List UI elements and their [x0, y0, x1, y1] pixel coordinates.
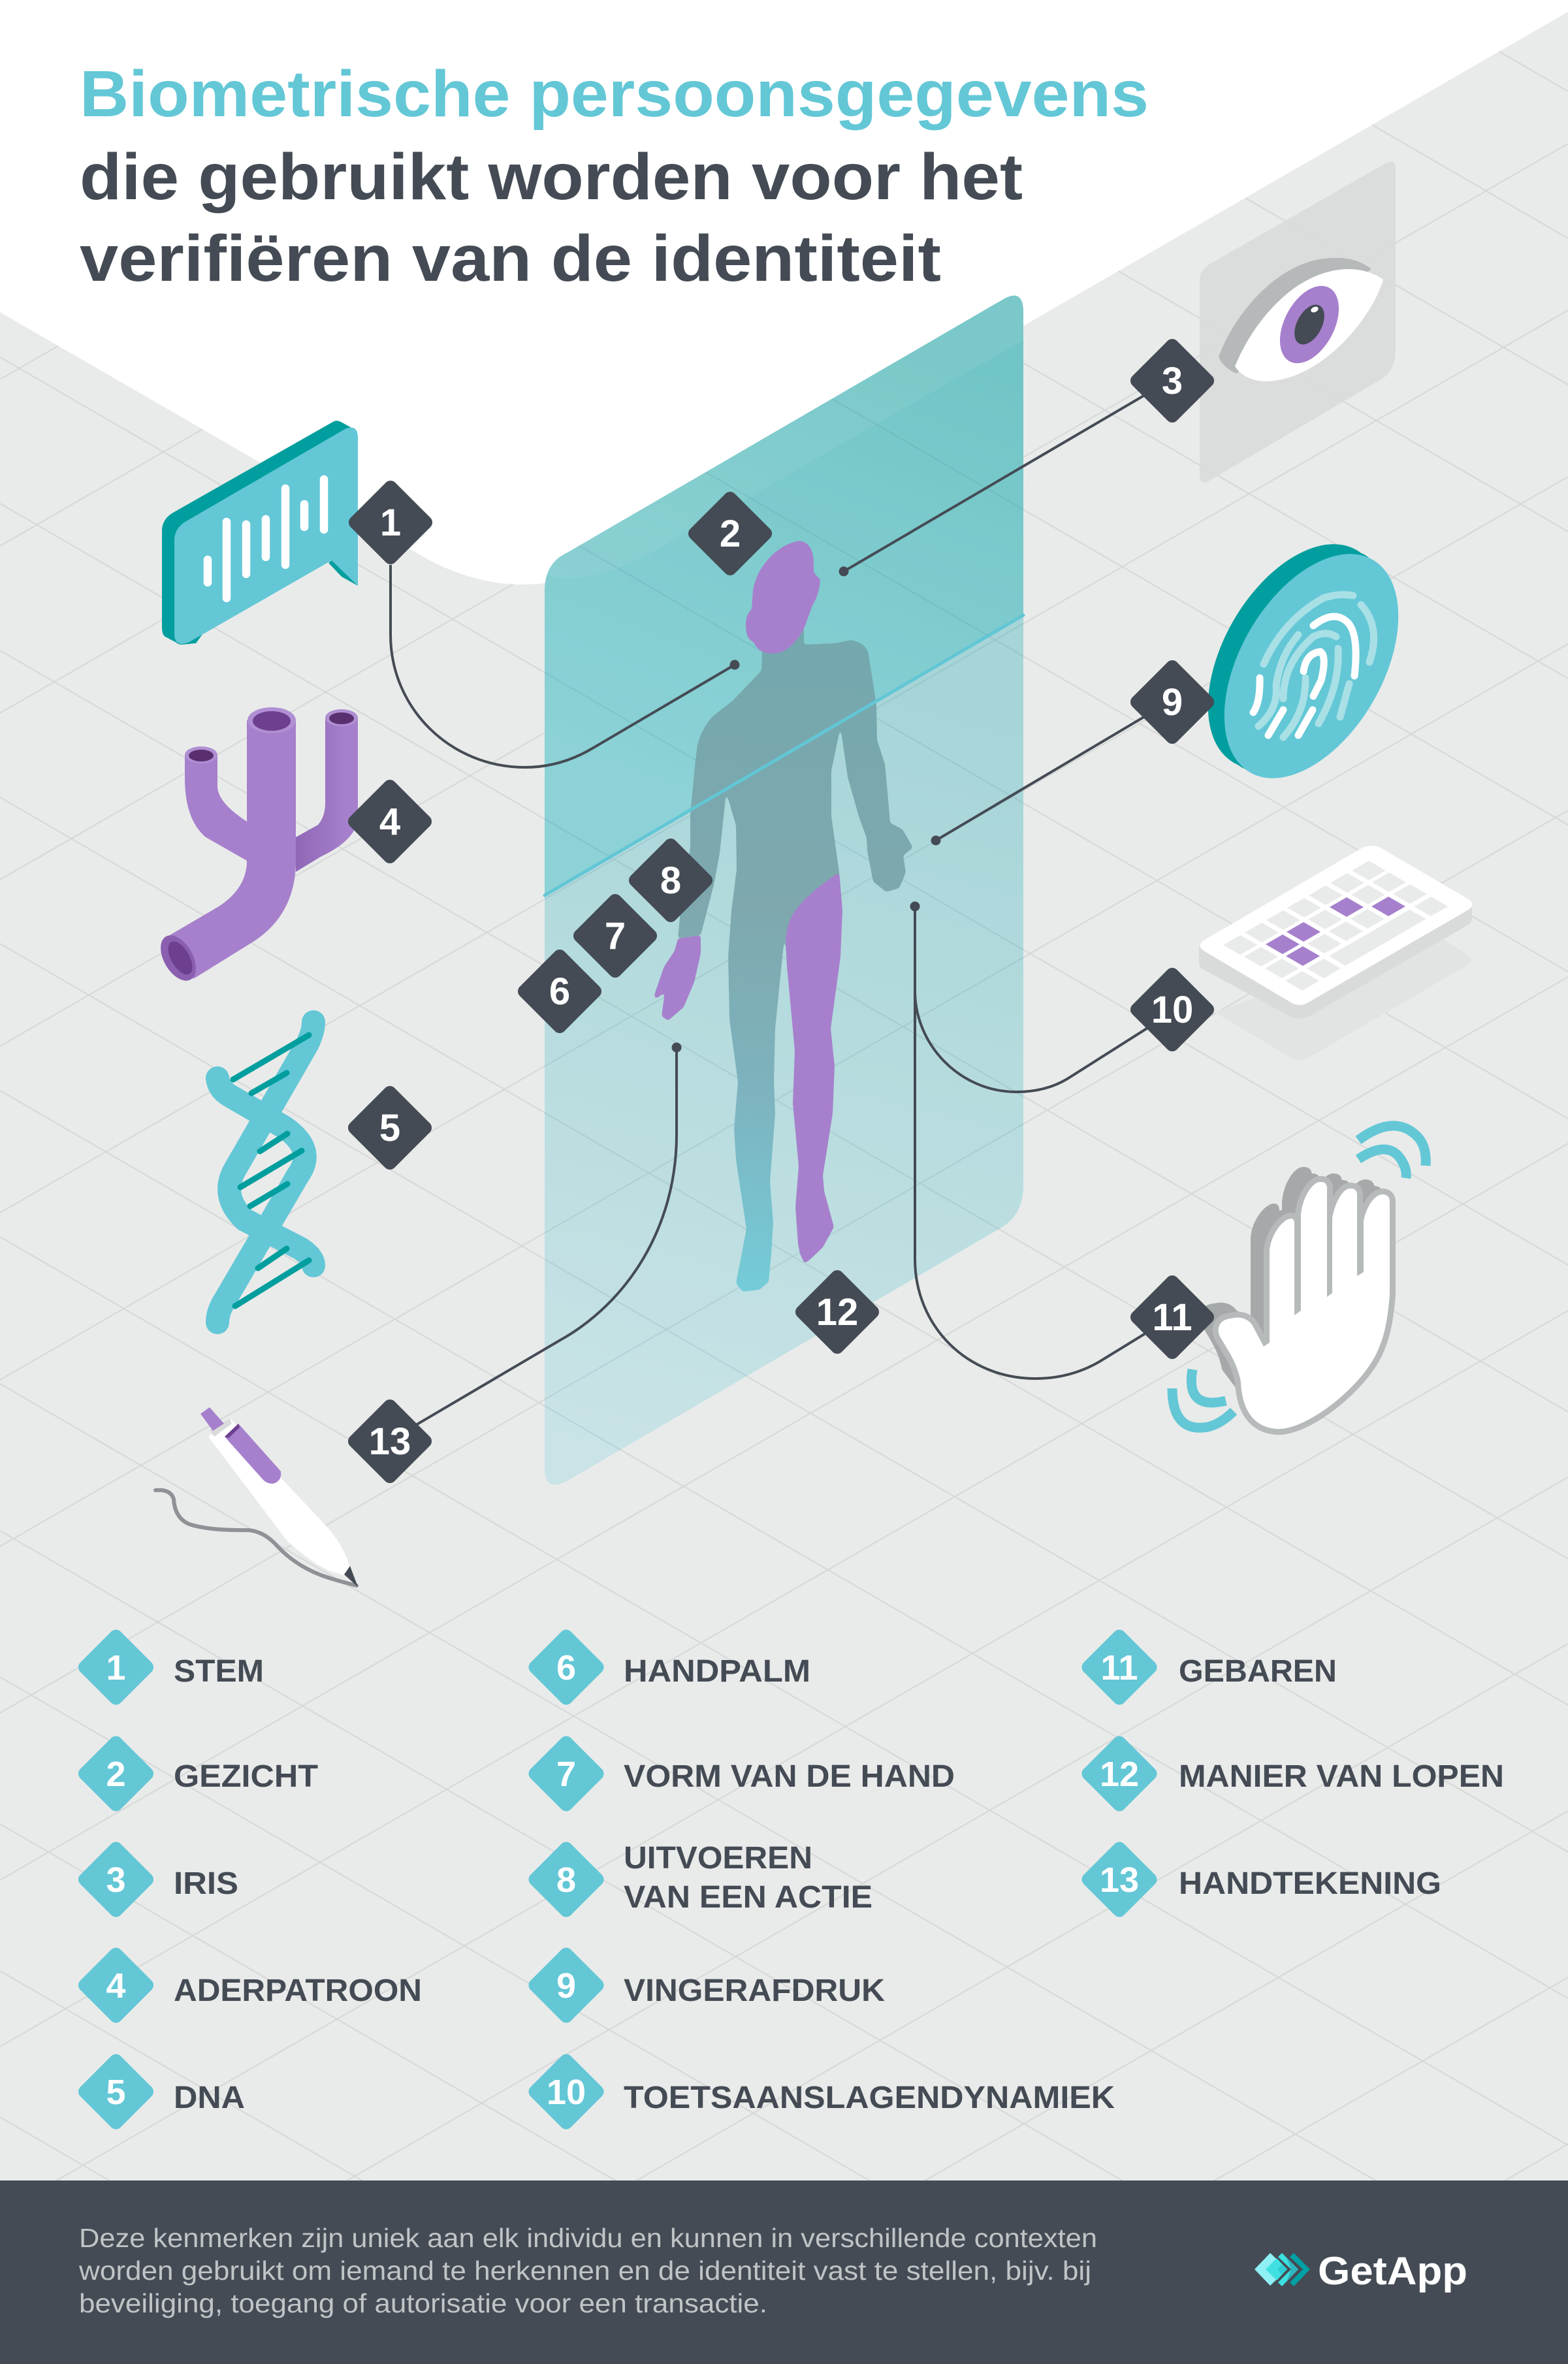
badge 13 [345, 1397, 434, 1486]
badge 3: 3 [1162, 360, 1183, 402]
legend item 9: 9 [556, 1966, 576, 2005]
legend item 8 [526, 1839, 872, 1920]
badge 2: 2 [720, 513, 741, 555]
badge 7: 7 [605, 915, 626, 957]
legend item 4: 4 [106, 1966, 126, 2005]
legend item 12: MANIER VAN LOPEN [1179, 1759, 1504, 1794]
legend item 6 [526, 1627, 810, 1708]
legend item 1: STEM [174, 1654, 264, 1689]
legend item 3 [76, 1839, 238, 1920]
legend item 5 [76, 2051, 245, 2132]
badge 3 [1128, 336, 1217, 425]
figure: face highlight [746, 541, 820, 654]
legend item 4: ADERPATROON [174, 1973, 422, 2008]
icon: eye on panel [1200, 162, 1396, 483]
badge 12: 12 [816, 1291, 858, 1334]
badge 11 [1128, 1273, 1217, 1362]
footer text: worden gebruikt om iemand te herkennen en de identiteit vast te stellen, bijv. bij [78, 2256, 1091, 2286]
scan line [545, 615, 1023, 895]
footer text: Deze kenmerken zijn uniek aan elk individu en kunnen in verschillende contexten [79, 2223, 1097, 2253]
badge 12 [793, 1268, 882, 1356]
legend item 12: 12 [1100, 1755, 1139, 1794]
legend item 3: 3 [106, 1861, 126, 1900]
legend item 11 [1079, 1627, 1337, 1708]
legend item 11: 11 [1100, 1648, 1138, 1687]
legend item 8: 8 [556, 1861, 576, 1900]
legend item 8: VAN EEN ACTIE [624, 1880, 872, 1915]
legend item 10 [526, 2051, 1115, 2132]
badge 13: 13 [369, 1420, 411, 1463]
footer text: beveiliging, toegang of autorisatie voor een transactie. [79, 2288, 767, 2318]
GetApp logo: GetApp [1318, 2249, 1467, 2293]
figure: human silhouette [678, 627, 913, 1292]
legend item 9: VINGERAFDRUK [624, 1973, 885, 2008]
badge 4 [345, 777, 434, 866]
legend item 1: 1 [106, 1648, 126, 1687]
icon: fingerprint disc [1172, 515, 1434, 808]
white top area [0, 0, 1568, 584]
legend item 10: TOETSAANSLAGENDYNAMIEK [624, 2081, 1115, 2115]
connector lines [391, 389, 1156, 1431]
legend item 2 [76, 1733, 318, 1814]
badge 6 [515, 947, 604, 1036]
badge 1: 1 [380, 502, 401, 544]
badge 1 [346, 478, 435, 567]
legend item 13 [1079, 1839, 1441, 1920]
badge 10 [1128, 965, 1217, 1054]
title [80, 57, 1149, 295]
title: die gebruikt worden voor het [80, 140, 1023, 214]
panel: translucent scanner with figure [543, 295, 1025, 1485]
legend item 1 [76, 1627, 264, 1708]
legend item 6: 6 [556, 1648, 576, 1687]
badge 2 [686, 489, 775, 578]
badge 4: 4 [379, 801, 400, 843]
badge 8 [626, 836, 715, 925]
badge 8: 8 [660, 859, 681, 902]
legend item 9 [526, 1945, 885, 2026]
icon: DNA helix [217, 1022, 313, 1322]
GetApp logo [1255, 2249, 1467, 2293]
footer text [78, 2223, 1097, 2318]
badge 9 [1128, 658, 1217, 746]
legend item 5: DNA [174, 2081, 245, 2115]
legend item 11: GEBAREN [1179, 1654, 1337, 1689]
title: Biometrische persoonsgegevens [80, 57, 1149, 131]
legend item 12 [1079, 1733, 1504, 1814]
legend item 3: IRIS [174, 1866, 238, 1901]
badge 6: 6 [549, 970, 570, 1013]
legend item 13: HANDTEKENING [1179, 1866, 1441, 1901]
legend item 2: GEZICHT [174, 1759, 318, 1794]
icon: gesture hand with motion arcs [1172, 1126, 1426, 1429]
icon: pen and signature [155, 1407, 358, 1587]
legend item 7: VORM VAN DE HAND [624, 1759, 955, 1794]
icon: keyboard [1199, 846, 1472, 1060]
icon: voice speech bubble [162, 421, 358, 645]
badge 11: 11 [1152, 1296, 1192, 1339]
footer band [0, 2180, 1568, 2364]
legend [76, 1627, 1504, 2132]
badge 5 [345, 1083, 434, 1172]
legend item 2: 2 [106, 1755, 126, 1794]
figure: walking leg highlight [786, 872, 842, 1264]
icon: vein pattern [153, 707, 358, 987]
legend item 10: 10 [547, 2073, 586, 2112]
legend item 8: UITVOEREN [624, 1841, 812, 1876]
legend item 13: 13 [1100, 1861, 1139, 1900]
badge 7 [571, 891, 660, 980]
badge 10: 10 [1151, 989, 1193, 1031]
legend item 6: HANDPALM [624, 1654, 810, 1689]
title: verifiëren van de identiteit [80, 222, 941, 295]
legend item 7 [526, 1733, 955, 1814]
legend item 4 [76, 1945, 422, 2026]
figure: hand highlight [654, 935, 701, 1021]
legend item 5: 5 [106, 2073, 126, 2112]
badge 9: 9 [1162, 681, 1183, 724]
legend item 7: 7 [556, 1755, 576, 1794]
badge 5: 5 [379, 1107, 400, 1149]
